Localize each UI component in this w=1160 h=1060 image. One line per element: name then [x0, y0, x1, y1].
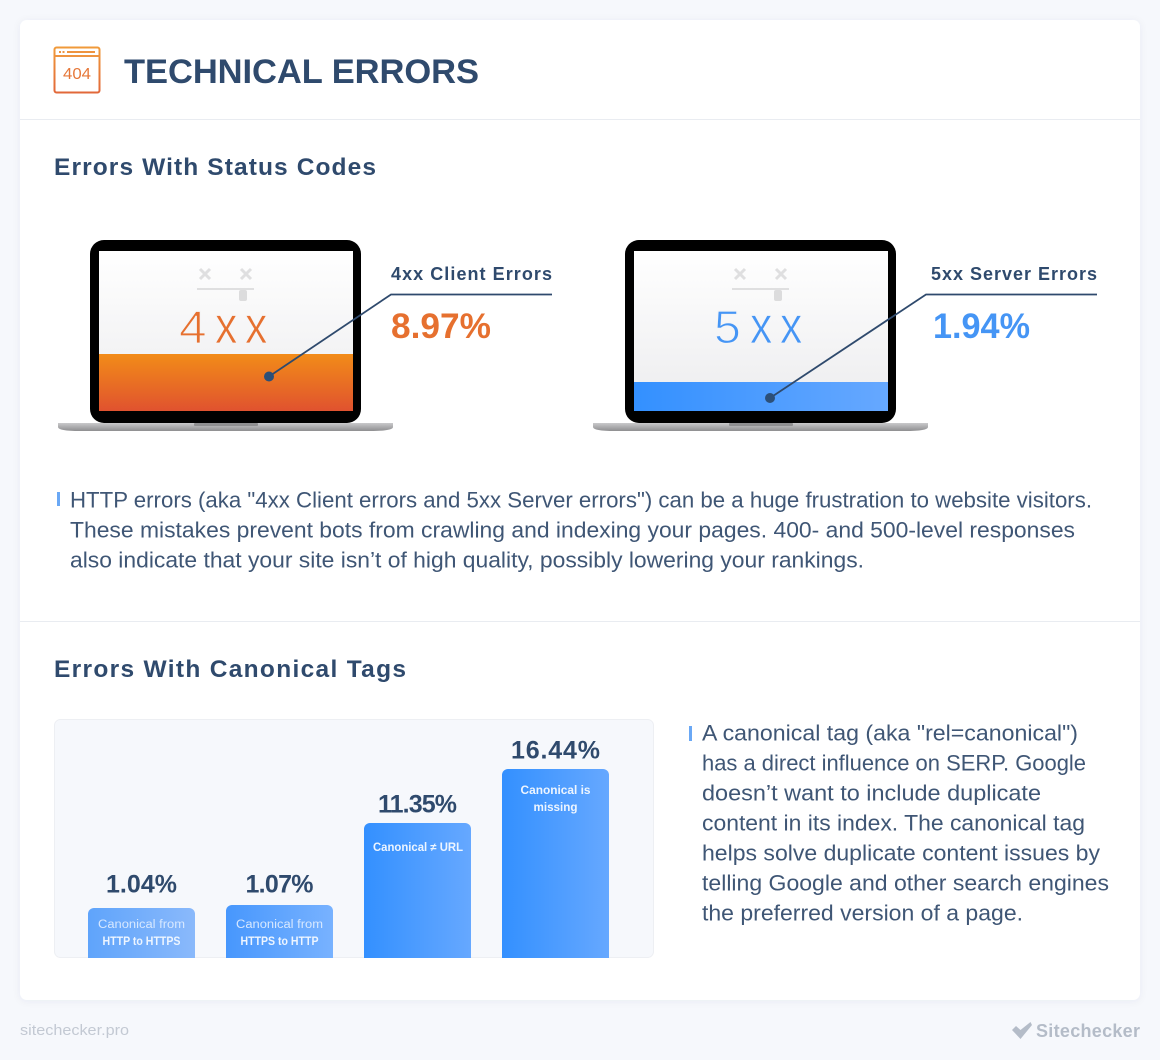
bar: HTTPS to HTTP: Canonical from [236, 919, 323, 931]
callout: 4xx leader line [264, 294, 552, 382]
label: 5xx server errors: 5xx Server Errors [931, 264, 1097, 284]
text block: canonical tag: doesn’t want to include duplicate [702, 780, 1041, 806]
bar: canonical missing [502, 736, 609, 958]
value: 8.97%: 8.97% [391, 307, 491, 346]
bar: HTTP to HTTPS: HTTP to HTTPS [102, 936, 181, 948]
bar: HTTP to HTTPS [88, 870, 195, 958]
footer: site url: sitechecker.pro [20, 1022, 129, 1039]
text block: http errors: also indicate that your site isn’t of high quality, possibly lowering your rankings. [70, 548, 864, 572]
text block: canonical tag: helps solve duplicate content issues by [702, 840, 1100, 866]
label: 4xx client errors: 4xx Client Errors [391, 264, 552, 284]
text block: canonical tag: has a direct influence on SERP. Google [702, 750, 1086, 776]
text block: canonical tag: content in its index. The canonical tag [702, 810, 1085, 836]
text block: canonical tag: telling Google and other search engines [702, 870, 1109, 896]
laptop: 4xx client errors: x [245, 297, 267, 355]
bar: HTTPS to HTTP: HTTPS to HTTP [240, 936, 319, 948]
callout: 5xx leader line [765, 294, 1097, 403]
bar chart: canonical errors [54, 720, 654, 958]
text block: canonical tag: A canonical tag (aka "rel=canonical") [702, 720, 1078, 746]
laptop: 5xx server errors: x [780, 297, 802, 355]
value: 1.94%: 1.94% [933, 307, 1030, 346]
bar: canonical missing: missing [534, 802, 578, 814]
chart panel [54, 720, 654, 958]
bar: canonical not equal URL: 11.35% [378, 790, 457, 818]
text block: http errors [57, 488, 1092, 572]
laptop: 5xx server errors [593, 240, 928, 431]
text block: canonical tag [689, 720, 1109, 926]
title: TECHNICAL ERRORS [124, 53, 479, 91]
bar: canonical missing: 16.44% [511, 736, 600, 764]
bar: HTTPS to HTTP: 1.07% [246, 870, 314, 898]
heading: errors with canonical tags: Errors With Canonical Tags [54, 656, 406, 683]
text block: http errors: These mistakes prevent bots from crawling and indexing your pages. 400- and 500-level responses [70, 518, 1075, 542]
laptop: 5xx server errors: 5 [714, 301, 741, 353]
heading: errors with status codes: Errors With Status Codes [54, 154, 376, 181]
bar: HTTP to HTTPS: Canonical from [98, 919, 185, 931]
text block: canonical tag: the preferred version of a page. [702, 900, 1023, 926]
bar: canonical not equal URL [364, 790, 471, 958]
icon: 404 browser window: 404 [63, 66, 91, 83]
bar: HTTP to HTTPS: 1.04% [106, 870, 177, 898]
laptop: 4xx client errors [58, 240, 393, 431]
footer: sitechecker logo: Sitechecker [1036, 1021, 1140, 1041]
text block: http errors: HTTP errors (aka "4xx Client errors and 5xx Server errors") can be a huge frustration to website visitors. [70, 488, 1092, 512]
laptop: 5xx server errors: x [750, 297, 772, 355]
icon: 404 browser window [54, 48, 100, 92]
laptop: 4xx client errors: x [215, 297, 237, 355]
laptop: 4xx client errors: 4 [179, 303, 207, 354]
bar: canonical not equal URL: Canonical ≠ URL [373, 842, 463, 854]
bar: canonical missing: Canonical is [520, 785, 590, 797]
bar: HTTPS to HTTP [226, 870, 333, 958]
